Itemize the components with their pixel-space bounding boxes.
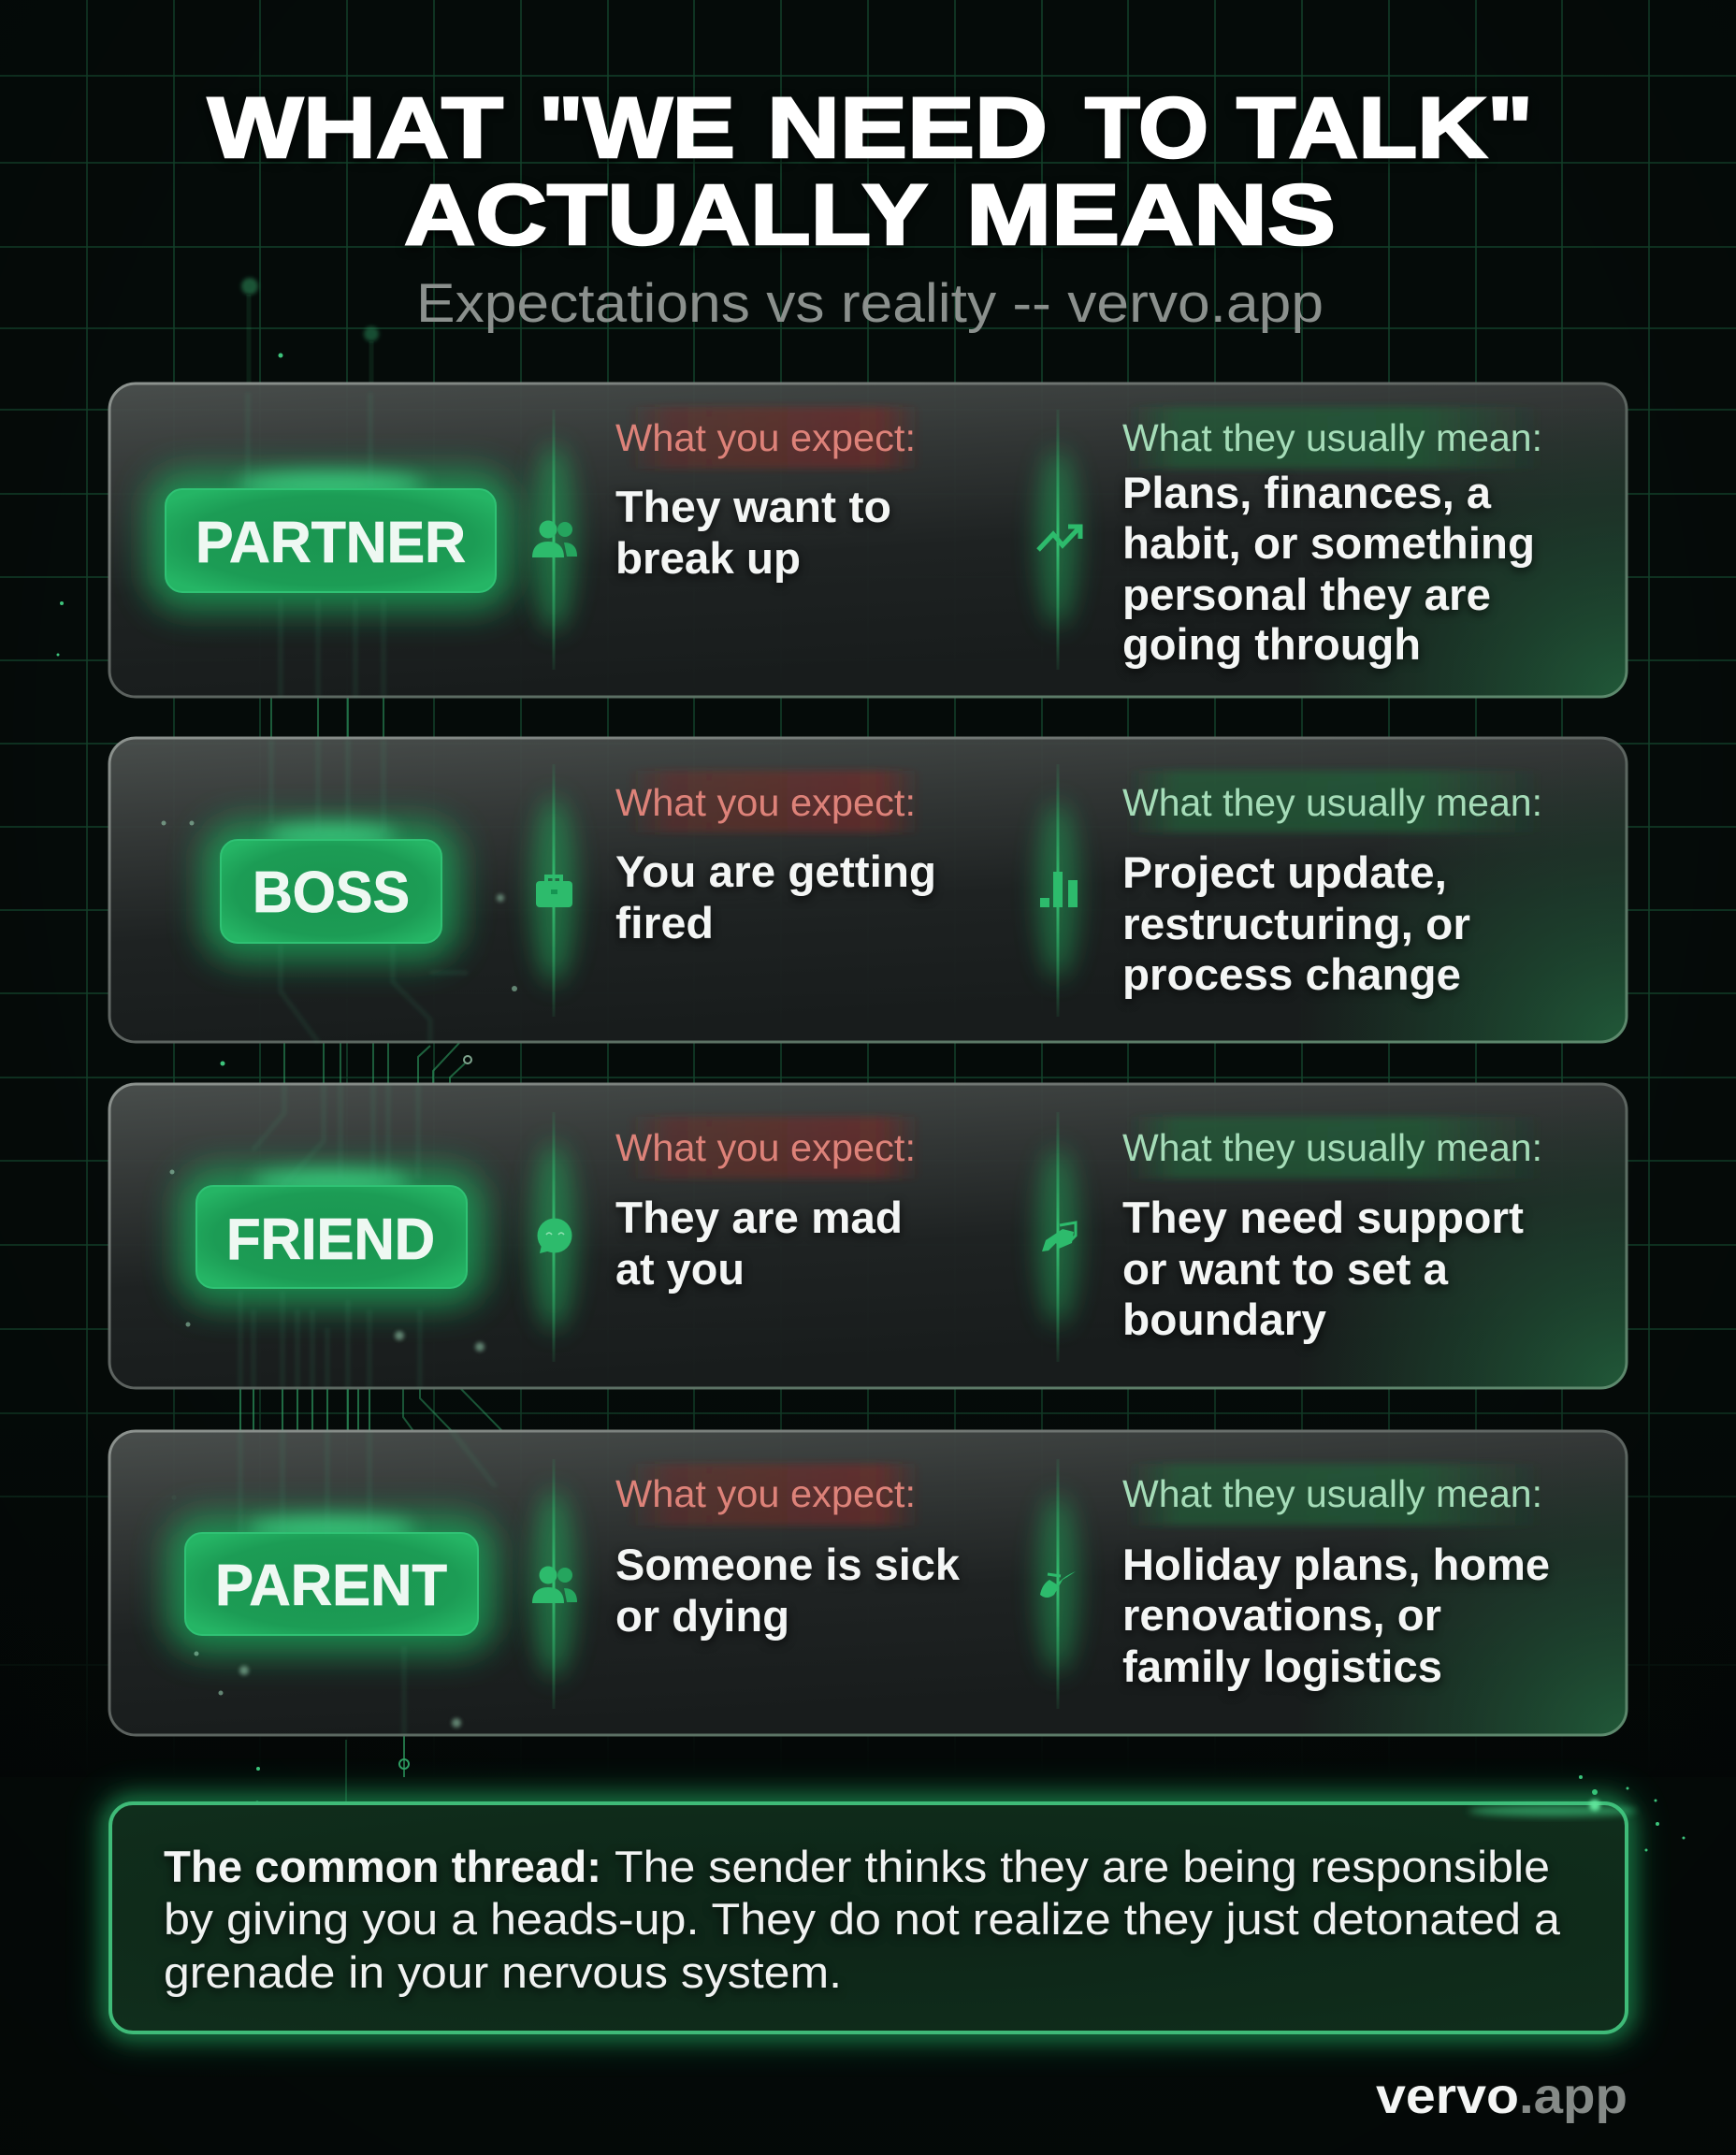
mean column: What they usually mean:: [1122, 416, 1542, 459]
mean column: restructuring, or: [1122, 899, 1470, 948]
title: NEED: [767, 80, 1048, 176]
mean column: family logistics: [1122, 1642, 1442, 1691]
callout: the common thread: The sender thinks they are being responsible: [615, 1842, 1550, 1891]
badge: partner: PARTNER: [195, 511, 466, 575]
expect column: [615, 771, 936, 947]
mean column: or want to set a: [1122, 1244, 1449, 1294]
title: MEANS: [966, 167, 1336, 263]
mean column: They need support: [1122, 1193, 1524, 1242]
title: "WE: [539, 80, 735, 176]
title: [208, 80, 1533, 263]
callout: the common thread: by giving you a heads-up. They do not realize they just detonated a: [164, 1894, 1561, 1944]
mean column: personal they are: [1122, 570, 1491, 619]
panel: boss: [109, 738, 1627, 1042]
circuit traces behind the cards: [240, 278, 502, 1871]
mean column: process change: [1122, 949, 1461, 999]
expect column: break up: [615, 533, 801, 583]
expect column: [615, 1117, 921, 1294]
divider with chat icon: [531, 1112, 576, 1362]
divider with leaf icon: [1037, 1459, 1078, 1709]
divider with briefcase icon: [531, 764, 576, 1017]
expect column: [615, 1464, 961, 1641]
mean column: Project update,: [1122, 847, 1447, 897]
mean column: Plans, finances, a: [1122, 468, 1492, 517]
mean column: What they usually mean:: [1122, 1472, 1542, 1515]
expect column: They are mad: [615, 1193, 903, 1242]
badge: friend: [178, 1167, 485, 1307]
badge: parent: [166, 1514, 497, 1654]
badge: boss: BOSS: [253, 861, 410, 925]
expect column: [615, 407, 921, 583]
expect column: They want to: [615, 482, 891, 531]
title: ACTUALLY: [404, 167, 928, 263]
title: TO: [1085, 80, 1208, 176]
expect column: fired: [615, 898, 714, 947]
brand: vervo.app: vervo: [1376, 2068, 1519, 2124]
callout: the common thread: The common thread:: [164, 1842, 601, 1891]
divider with trend icon: [1037, 410, 1080, 670]
mean column: What they usually mean:: [1122, 781, 1542, 824]
mean column: going through: [1122, 619, 1421, 669]
expect column: What you expect:: [615, 416, 916, 459]
callout: the common thread: grenade in your nervous system.: [164, 1947, 842, 1997]
expect column: at you: [615, 1244, 745, 1294]
title: TALK": [1237, 80, 1533, 176]
divider with handshake icon: [1037, 1112, 1078, 1362]
mean column: What they usually mean:: [1122, 1126, 1542, 1169]
title: WHAT: [208, 80, 503, 176]
faint circuit traces over the cards: [240, 393, 496, 1735]
brand: vervo.app: [1376, 2068, 1628, 2124]
mean column: [1122, 407, 1543, 669]
badge: boss: [202, 821, 460, 962]
badge: parent: PARENT: [215, 1554, 447, 1618]
card particles: [161, 821, 517, 1728]
mean column: boundary: [1122, 1294, 1326, 1344]
badge: partner: [147, 470, 514, 611]
expect column: Someone is sick: [615, 1540, 961, 1589]
callout: the common thread: [101, 1794, 1637, 2042]
mean column: habit, or something: [1122, 518, 1535, 568]
expect column: What you expect:: [615, 1126, 916, 1169]
expect column: You are getting: [615, 846, 936, 896]
panel: friend: [109, 1084, 1627, 1388]
mean column: renovations, or: [1122, 1590, 1441, 1640]
panel: parent: [109, 1431, 1627, 1735]
subtitle: Expectations vs reality -- vervo.app: [416, 273, 1324, 334]
mean column: [1122, 1117, 1543, 1344]
badge: friend: FRIEND: [226, 1208, 435, 1272]
divider with people icon: [531, 410, 577, 670]
mean column: [1122, 771, 1543, 999]
mean column: [1122, 1464, 1550, 1691]
particles: [56, 354, 1685, 1852]
divider with bar chart icon: [1037, 764, 1078, 1017]
expect column: or dying: [615, 1591, 789, 1641]
divider with people icon: [531, 1459, 577, 1709]
expect column: What you expect:: [615, 1472, 916, 1515]
mean column: Holiday plans, home: [1122, 1540, 1550, 1589]
panel: partner: [109, 383, 1627, 697]
expect column: What you expect:: [615, 781, 916, 824]
brand: vervo.app: .app: [1519, 2068, 1628, 2124]
